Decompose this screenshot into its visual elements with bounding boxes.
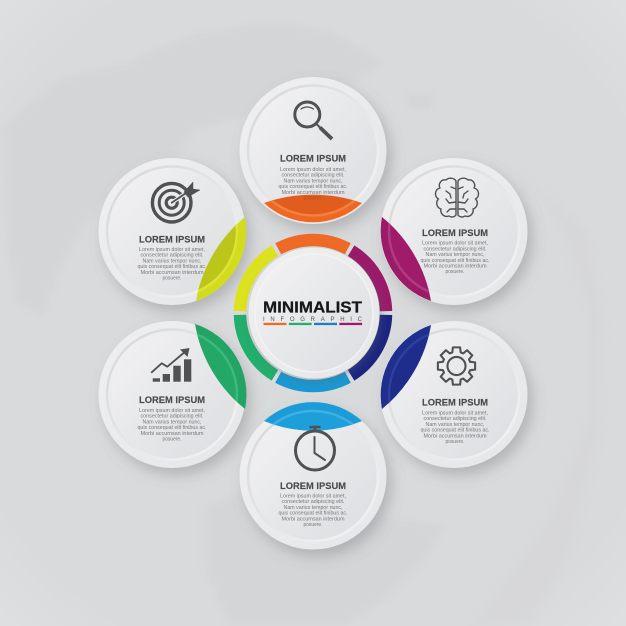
text block <box>138 247 206 282</box>
accent: blue lens <box>264 402 362 431</box>
icon: gear <box>438 347 475 385</box>
text block: posuere. <box>304 522 322 528</box>
text block: Lorem ipsum dolor sit amet, <box>422 410 488 416</box>
text block: Nam varius tempor nunc, <box>142 419 202 425</box>
text block: posuere. <box>304 196 322 202</box>
panel: brain (upper-right circle) <box>376 158 528 306</box>
icon: stopwatch <box>296 427 334 470</box>
text block: consectetur adipiscing elit. <box>140 414 204 420</box>
center disc <box>248 248 380 378</box>
text block: Lorem ipsum dolor sit amet, <box>280 494 346 500</box>
text block: quis consequat elit finibus ac. <box>420 258 490 264</box>
heading: LOREM IPSUM <box>139 234 205 246</box>
panel: growth chart (lower-left circle) <box>98 318 250 468</box>
accent: yellow lens <box>196 217 246 301</box>
subtitle: INFOGRAPHIC <box>263 317 363 323</box>
text block: quis consequat elit finibus ac. <box>278 184 348 190</box>
text block: Morbi accumsan interdum <box>282 190 345 196</box>
text block: Nam varius tempor nunc, <box>142 258 202 264</box>
panel: search (top circle) <box>240 77 386 230</box>
text block: Morbi accumsan interdum <box>282 516 345 522</box>
text block: quis consequat elit finibus ac. <box>138 264 206 270</box>
heading: LOREM IPSUM <box>280 154 346 164</box>
text block <box>278 494 348 528</box>
icon: target with arrow <box>152 182 200 222</box>
text block: Morbi accumsan interdum <box>140 431 204 437</box>
title: MINIMALIST <box>263 300 363 316</box>
icon: bar chart with arrow <box>152 348 191 382</box>
panel: stopwatch (bottom circle) <box>240 398 386 550</box>
text block: Lorem ipsum dolor sit amet, <box>422 241 488 247</box>
text block: Morbi accumsan interdum <box>424 264 487 270</box>
accent: orange lens <box>264 194 362 222</box>
text block: posuere. <box>446 269 464 275</box>
heading: LOREM IPSUM <box>139 395 205 406</box>
text block: Nam varius tempor nunc, <box>426 422 484 428</box>
text block: Lorem ipsum dolor sit amet, <box>280 167 346 173</box>
text block: consectetur adipiscing elit. <box>282 173 344 179</box>
text block: Morbi accumsan interdum <box>424 433 487 439</box>
text block: posuere. <box>162 276 182 282</box>
accent: magenta lens <box>380 217 431 301</box>
heading: LOREM IPSUM <box>422 228 488 239</box>
text block: posuere. <box>162 436 182 442</box>
text block <box>138 408 206 442</box>
accent: navy lens <box>380 325 431 409</box>
icon: brain <box>436 178 478 217</box>
text block: quis consequat elit finibus ac. <box>278 511 348 517</box>
text block: Morbi accumsan interdum <box>140 270 204 276</box>
panel: gear (lower-right circle) <box>376 320 528 468</box>
text block: Lorem ipsum dolor sit amet, <box>139 408 205 414</box>
center ring: six coloured segments <box>240 240 386 386</box>
heading: LOREM IPSUM <box>422 398 488 408</box>
panel: target (upper-left circle) <box>98 158 250 306</box>
text block: Nam varius tempor nunc, <box>426 252 484 258</box>
text block: posuere. <box>446 439 464 445</box>
text block <box>278 167 348 202</box>
text block: consectetur adipiscing elit. <box>282 499 344 505</box>
title colour bars <box>264 323 362 325</box>
text block: quis consequat elit finibus ac. <box>138 425 206 431</box>
text block: Nam varius tempor nunc, <box>284 178 342 184</box>
text block <box>420 241 490 275</box>
text block: consectetur adipiscing elit. <box>424 246 486 252</box>
accent: green lens <box>195 324 246 409</box>
text block: consectetur adipiscing elit. <box>140 253 204 259</box>
heading: LOREM IPSUM <box>280 481 346 492</box>
text block <box>420 410 490 445</box>
text block: Lorem ipsum dolor sit amet, <box>139 247 205 253</box>
text block: consectetur adipiscing elit. <box>424 416 486 422</box>
text block: quis consequat elit finibus ac. <box>420 428 490 434</box>
icon: magnifying glass <box>295 102 332 139</box>
text block: Nam varius tempor nunc, <box>284 505 342 511</box>
